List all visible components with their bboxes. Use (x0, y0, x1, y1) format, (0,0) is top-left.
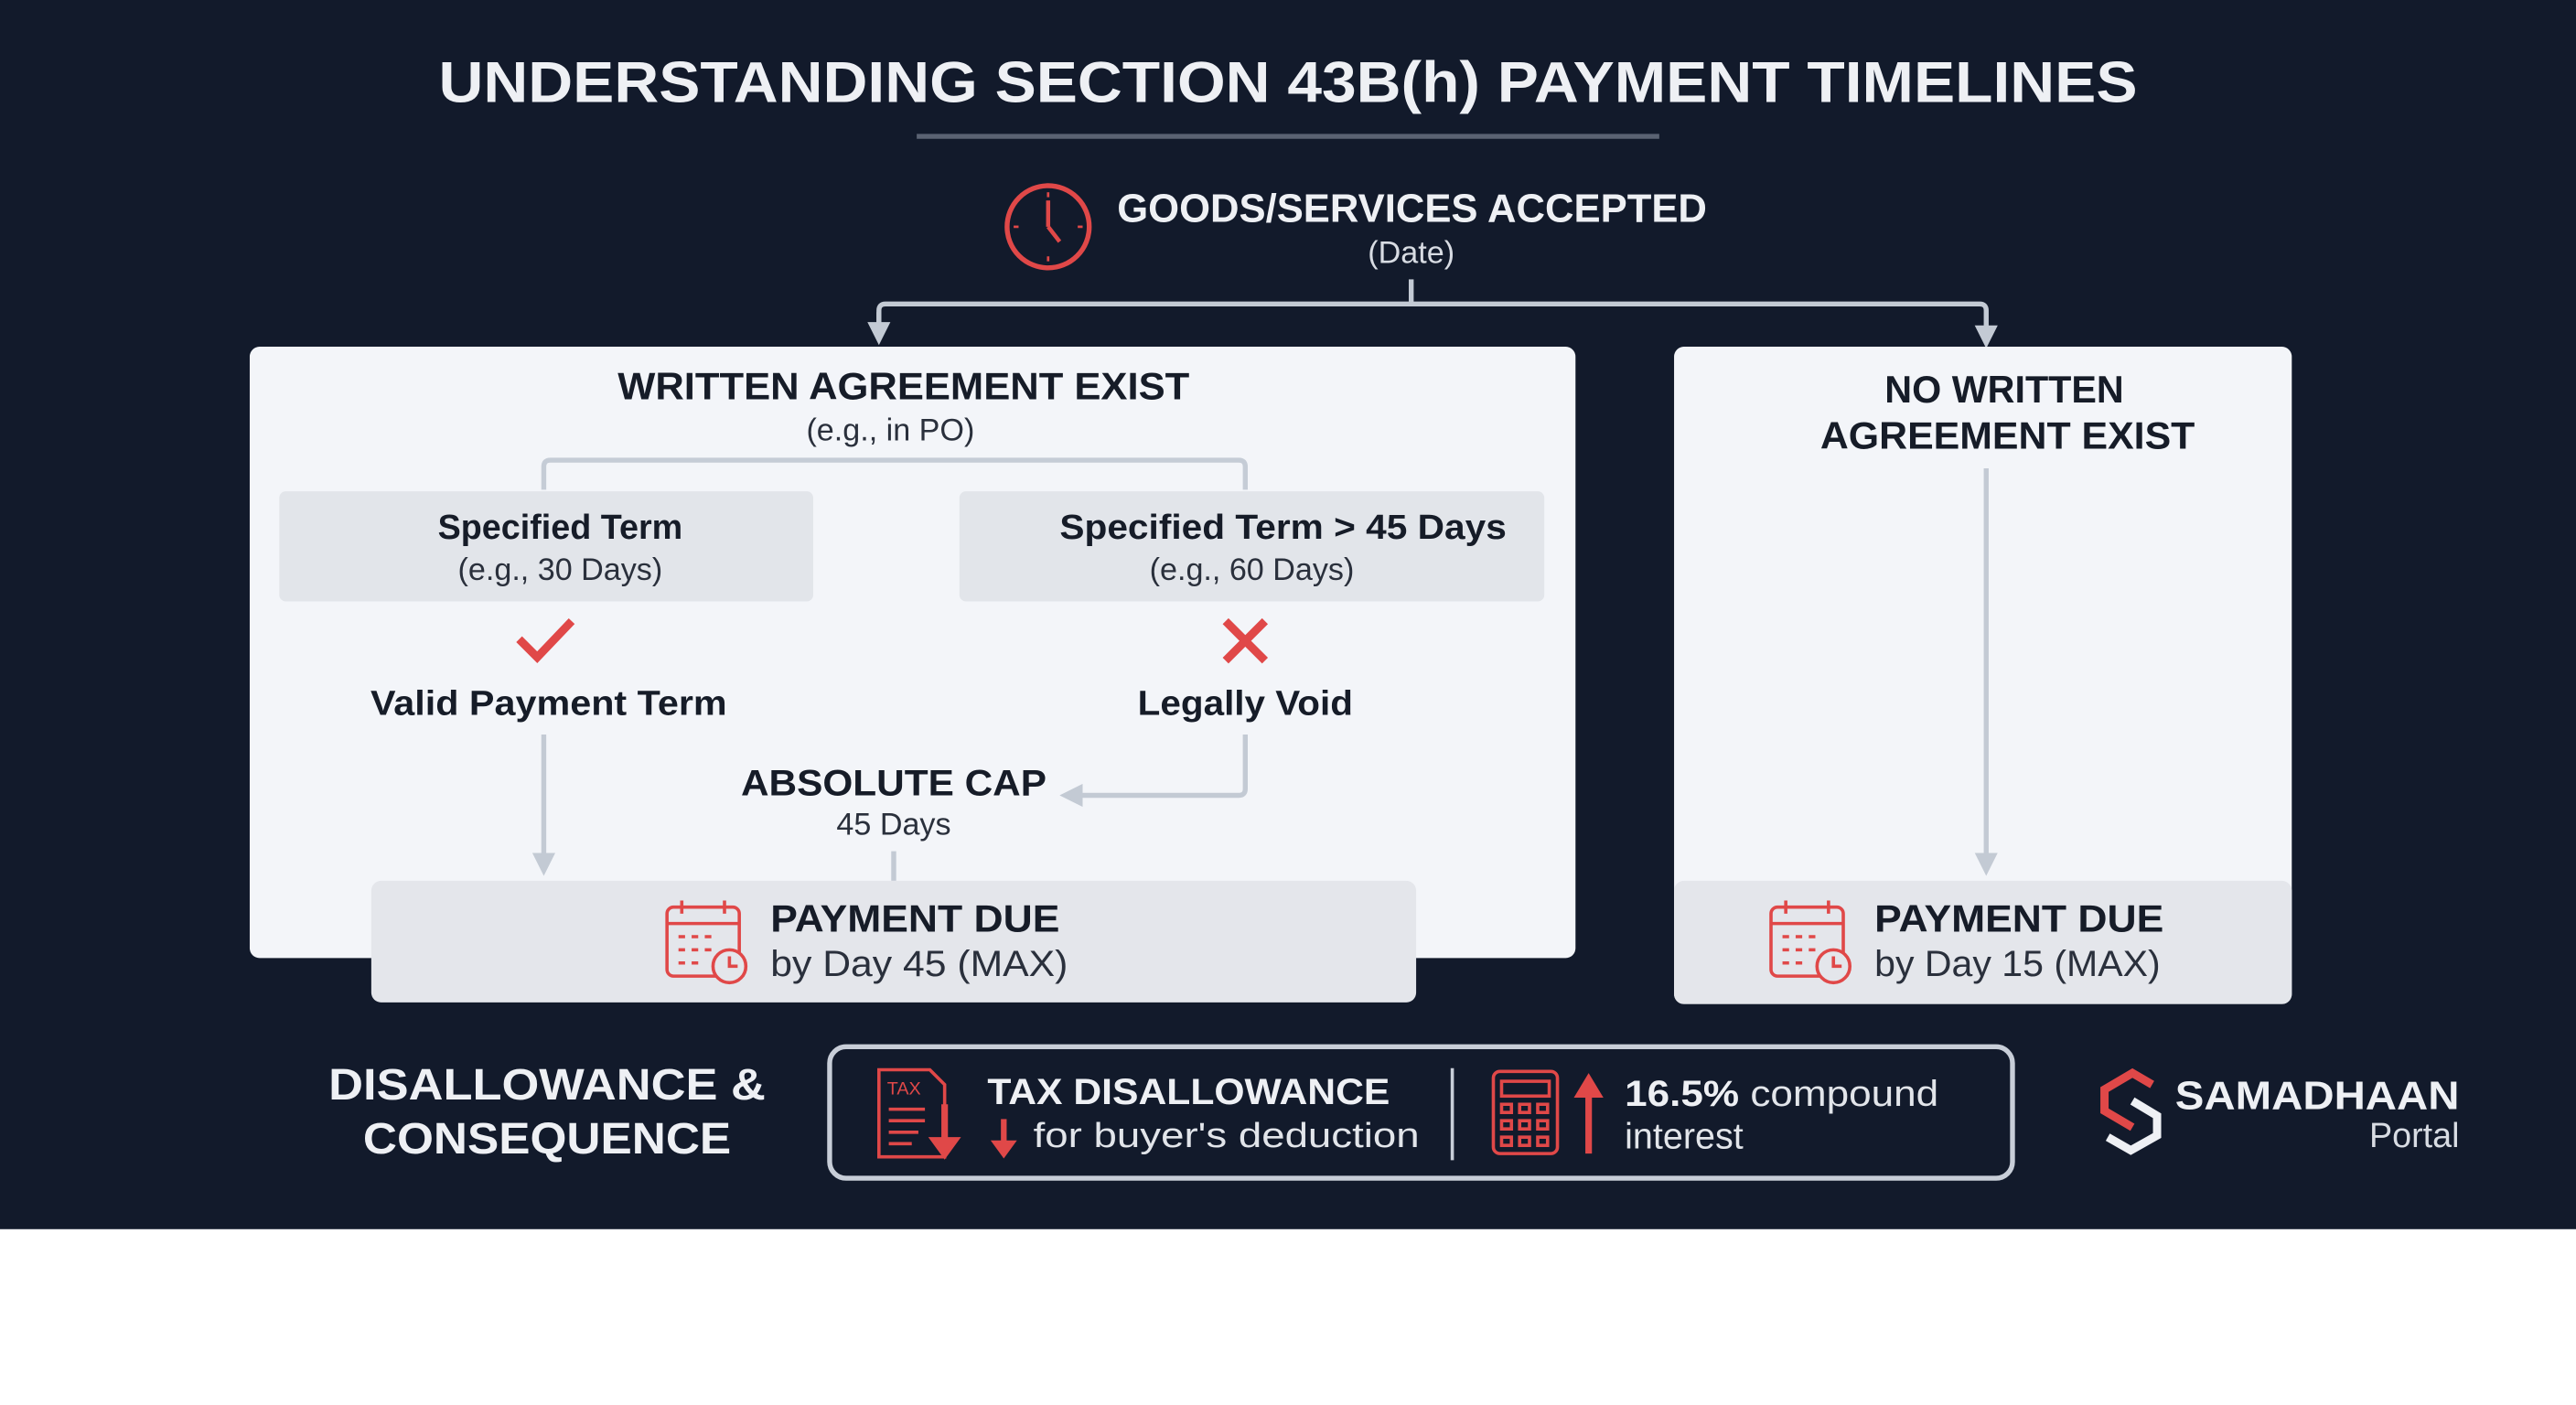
arrow: void to cap (1071, 735, 1245, 796)
icon: tax doc (879, 1070, 958, 1157)
box: payment due 15 (1674, 881, 2292, 1004)
label: absolute cap: ABSOLUTE CAP (741, 763, 1046, 804)
box: specified term > 45: Specified Term > 45 Days (1059, 508, 1507, 546)
icon: calendar (667, 900, 746, 982)
title: UNDERSTANDING SECTION 43B(h) PAYMENT TIMELINES (439, 50, 2137, 114)
box: payment due 45 (371, 881, 1416, 1003)
icon: check (520, 621, 572, 658)
panel: no written agreement: AGREEMENT EXIST (1820, 414, 2195, 456)
arrow: valid to payment (542, 735, 545, 864)
logo: samadhaan (2105, 1073, 2459, 1154)
heading: disallowance & consequence (328, 1060, 766, 1164)
start node: goods accepted: GOODS/SERVICES ACCEPTED (1117, 188, 1707, 231)
label: valid payment term: Valid Payment Term (370, 683, 727, 722)
heading: written agreement: WRITTEN AGREEMENT EXIST (617, 366, 1189, 408)
icon: tax doc: TAX (887, 1078, 921, 1099)
panel: consequences: for buyer's deduction (1034, 1116, 1420, 1154)
heading: written agreement (617, 366, 1189, 447)
arrow: split to branches (879, 279, 1986, 337)
heading: written agreement: (e.g., in PO) (806, 413, 974, 447)
label: legally void: Legally Void (1138, 683, 1353, 722)
icon: cross (1226, 621, 1265, 660)
box: payment due 15: PAYMENT DUE (1874, 898, 2163, 940)
box: payment due 45: by Day 45 (MAX) (770, 944, 1068, 984)
label: absolute cap: 45 Days (836, 808, 951, 842)
box: payment due 45: PAYMENT DUE (770, 898, 1059, 940)
panel: consequences: TAX DISALLOWANCE (987, 1072, 1390, 1112)
box: payment due 15: by Day 15 (MAX) (1874, 944, 2161, 984)
panel: no written agreement (1674, 347, 2292, 1004)
heading: disallowance & consequence: CONSEQUENCE (363, 1114, 731, 1164)
heading: disallowance & consequence: DISALLOWANCE & (328, 1060, 766, 1110)
box: specified term > 45 (960, 491, 1544, 602)
logo: samadhaan: SAMADHAAN (2175, 1075, 2459, 1119)
panel: consequences: 16.5% compound (1625, 1074, 1938, 1114)
panel: consequences: interest (1625, 1117, 1744, 1157)
box: specified term > 45: (e.g., 60 Days) (1150, 552, 1354, 587)
label: absolute cap (741, 763, 1046, 842)
icon: calculator (1493, 1071, 1558, 1153)
panel: written agreement (250, 347, 1575, 958)
logo: samadhaan: Portal (2369, 1116, 2459, 1154)
start node: goods accepted (1117, 188, 1707, 270)
icon: clock (1007, 186, 1089, 268)
box: specified term: (e.g., 30 Days) (458, 552, 662, 587)
box: specified term: Specified Term (438, 508, 682, 546)
panel: consequences (830, 1046, 2012, 1178)
box: specified term (279, 491, 813, 602)
panel: no written agreement: NO WRITTEN (1884, 369, 2124, 411)
start node: goods accepted: (Date) (1368, 235, 1454, 270)
